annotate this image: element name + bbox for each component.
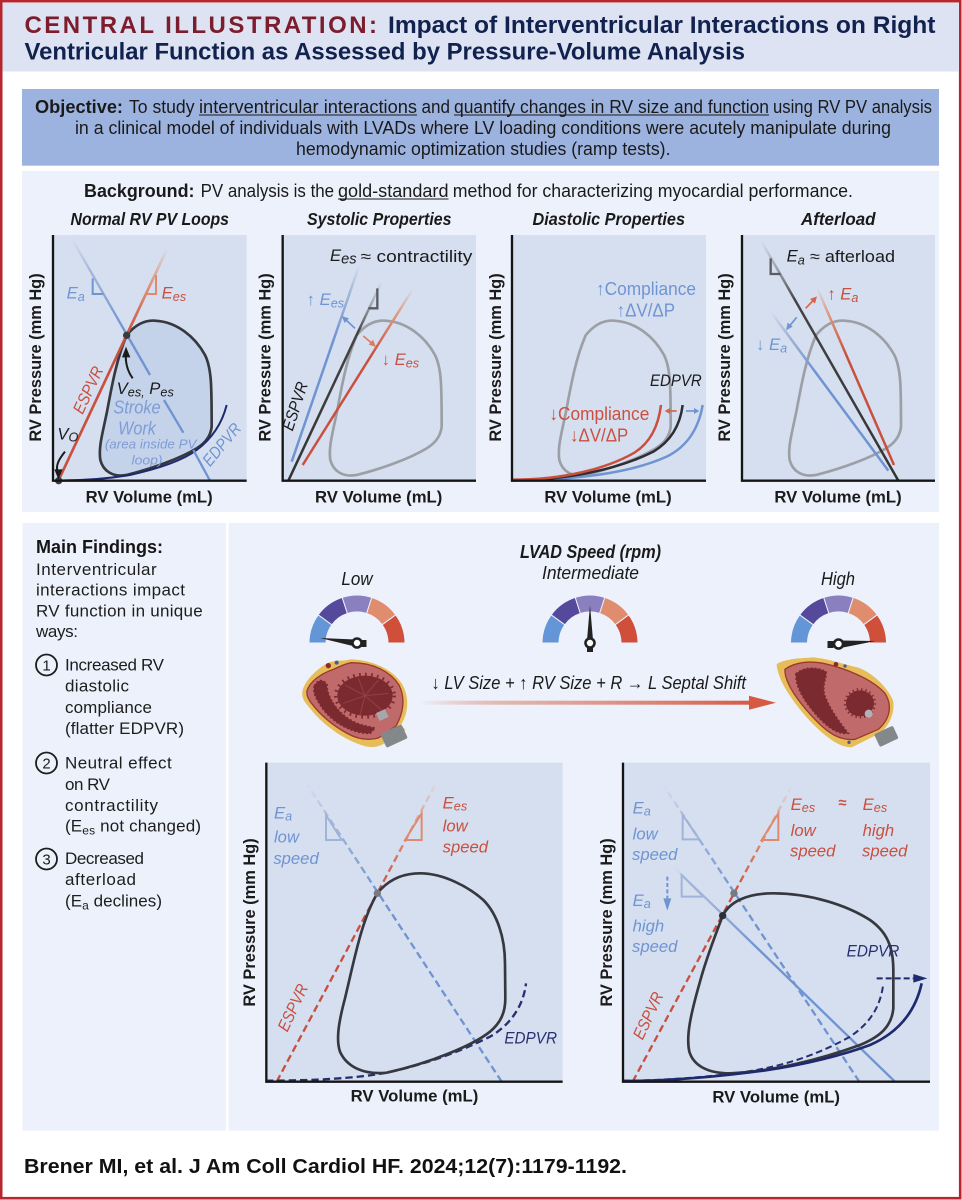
label Ea high speed: E [633, 891, 644, 910]
gauge: low [309, 595, 405, 648]
label Ea low speed [632, 798, 678, 864]
finding 2: es [82, 824, 95, 838]
PV loop high speed [688, 893, 893, 1073]
label ESPVR: ESPVR [69, 363, 107, 417]
label Ea low speed: E [274, 803, 285, 822]
label increased Ees: ↑ E [307, 290, 331, 309]
Ees triangle [762, 813, 778, 840]
label Ees high speed: high [863, 821, 894, 840]
Ea high speed solid line [673, 867, 895, 1082]
end systolic point low speed [730, 890, 738, 897]
label Ees low speed [443, 793, 489, 857]
title band [2, 3, 959, 72]
label Ea low speed: low [274, 828, 300, 847]
background statement: method for characterizing myocardial performance. [453, 181, 853, 201]
red shift arrow [665, 408, 677, 414]
label Ves Pes: es, [128, 386, 145, 400]
panel: objective: To study [129, 97, 194, 117]
label Ea: a [78, 290, 85, 304]
label Ees low speed: E [791, 795, 802, 814]
panel: objective: using RV PV analysis [773, 97, 932, 117]
column headings: Diastolic Properties [532, 209, 685, 229]
increased Ees line [292, 265, 359, 462]
gauge: intermediate [542, 595, 638, 652]
finding 1 [36, 654, 184, 738]
panel: background [22, 171, 939, 512]
red shift arrow [806, 296, 817, 308]
label EDPVR: EDPVR [504, 1028, 557, 1047]
panel: objective: interventricular interactions [199, 97, 417, 117]
icon: heart cross section with enlarged RV [777, 657, 899, 747]
label Ees low speed [790, 795, 836, 861]
finding 1: (flatter EDPVR) [65, 719, 184, 738]
approx equal sign: ≈ [838, 795, 846, 811]
label Ees high speed: speed [862, 842, 908, 861]
label Ea low speed: E [633, 798, 644, 817]
ESPVR dashed line [277, 781, 437, 1082]
finding 3: a [82, 899, 89, 913]
panel: main findings [22, 523, 226, 1131]
axes [53, 235, 247, 481]
label decreased compliance: ↓ΔV/ΔP [570, 425, 628, 446]
label EDPVR: EDPVR [650, 371, 702, 390]
chart: low LVAD speed PV loop [240, 763, 563, 1106]
red shift arrow [363, 336, 376, 347]
x axis label: RV Volume (mL) [712, 1087, 840, 1106]
label Ees low speed: E [443, 793, 454, 812]
label stroke work: loop) [131, 453, 162, 467]
label Ees low speed: speed [790, 842, 836, 861]
panel: objective [22, 89, 939, 166]
heading: Main Findings: [36, 537, 163, 557]
dashed arrow right [877, 974, 927, 983]
x axis label: RV Volume (mL) [544, 488, 672, 507]
label increased Ea: a [851, 291, 858, 305]
column headings: Systolic Properties [307, 209, 452, 229]
intro text: Interventricular [36, 560, 157, 579]
finding 2: 2 [42, 756, 51, 772]
title band: Impact of Interventricular Interactions on Right [388, 12, 936, 39]
high speed label: High [821, 569, 855, 589]
citation: Brener MI, et al. J Am Coll Cardiol HF. 2024;12(7):1179-1192. [24, 1156, 627, 1178]
baseline Ea line [761, 240, 898, 481]
EDPVR dashed curve [266, 983, 526, 1081]
grey PV loop [559, 321, 671, 476]
finding 3: 3 [42, 852, 51, 868]
label increased compliance: ↑Compliance [596, 278, 696, 299]
end systolic point high speed [719, 912, 726, 919]
PV loop with stroke work fill [100, 321, 212, 476]
y axis label: RV Pressure (mm Hg) [486, 273, 505, 442]
label Ees low speed: low [791, 821, 817, 840]
decreased Ees line [303, 289, 413, 465]
label Ea afterload [787, 247, 895, 267]
label Ees contractility: es [341, 252, 357, 268]
label Ees low speed: es [454, 799, 468, 813]
label Ves Pes: P [145, 379, 160, 398]
background statement: Background: [84, 181, 194, 201]
intro text: RV function in unique [36, 602, 203, 621]
background statement: gold-standard [338, 181, 448, 201]
intro text: ways: [35, 622, 78, 641]
x axis label: RV Volume (mL) [86, 488, 213, 507]
dashed arrow down [663, 877, 671, 911]
increased Ea line [817, 288, 894, 465]
arrow to end systolic point [122, 347, 133, 378]
blue shift arrow [686, 408, 699, 414]
label Ea low speed: a [285, 809, 292, 823]
label increased Ea: ↑ E [827, 284, 851, 303]
finding 2: not changed) [95, 817, 201, 836]
label EDPVR: EDPVR [847, 942, 899, 961]
title band: Ventricular Function as Assessed by Pressure-Volume Analysis [24, 38, 745, 66]
finding 1: diastolic [65, 677, 130, 696]
label Ees high speed [862, 795, 908, 861]
arterial elastance line [72, 238, 210, 481]
label ESPVR: ESPVR [278, 379, 312, 433]
Ea low speed dashed line [663, 784, 859, 1082]
label Ea high speed: speed [632, 937, 678, 956]
plot area [266, 763, 563, 1082]
finding 2: Neutral effect [65, 753, 172, 772]
label increased compliance [596, 278, 696, 321]
x axis label: RV Volume (mL) [351, 1087, 478, 1106]
panel: objective: and [422, 97, 450, 117]
plot area: afterload [742, 235, 935, 481]
label stroke work: Stroke [113, 396, 161, 417]
finding 3: afterload [65, 870, 136, 889]
label Ea low speed [273, 803, 319, 868]
label EDPVR: EDPVR [199, 419, 245, 470]
LVAD speed heading: LVAD Speed (rpm) [520, 542, 661, 562]
chart: low versus high LVAD speed PV loop [597, 763, 930, 1106]
finding 2 [36, 752, 201, 838]
grey PV loop [330, 321, 442, 476]
finding 3 [36, 848, 162, 913]
ESPVR dashed line [633, 785, 792, 1082]
label Ves Pes: es [160, 386, 174, 400]
blue shift arrow [342, 316, 355, 328]
axes [266, 763, 563, 1082]
label stroke work: Work [118, 417, 157, 438]
title band: CENTRAL ILLUSTRATION: [24, 12, 377, 39]
label stroke work: (area inside PV [105, 437, 198, 451]
label Ea high speed: high [633, 916, 664, 935]
label Ea low speed: speed [273, 849, 319, 868]
axes [742, 235, 935, 481]
blue shift arrow [786, 317, 797, 330]
label increased compliance: ↑ΔV/ΔP [617, 300, 675, 321]
label decreased compliance [549, 403, 649, 446]
plot area: normal PV loop [52, 235, 247, 481]
label ESPVR: ESPVR [629, 989, 667, 1042]
label Ees: es [173, 290, 187, 304]
Ees triangle [405, 813, 422, 840]
panel: objective: Objective: [35, 97, 123, 117]
baseline Ees line [288, 282, 382, 481]
panel: objective: quantify changes in RV size and function [454, 97, 769, 117]
label Ea: E [67, 283, 78, 302]
y axis label: RV Pressure (mm Hg) [240, 838, 259, 1007]
label Ea afterload: a [798, 253, 805, 267]
x axis label: RV Volume (mL) [774, 488, 902, 507]
axes [623, 763, 930, 1082]
axes [283, 235, 476, 481]
finding 2: on RV [65, 775, 111, 794]
label V0: O [68, 430, 78, 444]
Ea triangle [93, 278, 103, 294]
label Ees contractility: E [330, 246, 341, 265]
Ea dashed line [306, 783, 502, 1082]
Ees triangle [145, 275, 156, 294]
finding 1: compliance [65, 698, 152, 717]
finding 3: (E [65, 892, 82, 911]
Ea low triangle [683, 815, 699, 839]
chart: normal RV PV loops and systolic properties [26, 235, 476, 507]
label Ees low speed: es [802, 801, 816, 815]
x axis label: RV Volume (mL) [315, 488, 442, 507]
label decreased Ees: ↓ E [382, 350, 406, 369]
arrow: septal shift [420, 696, 776, 710]
finding 2: contractility [65, 796, 158, 815]
panel: objective: in a clinical model of individuals with LVADs where LV loading conditions were acutely manipulate during [75, 118, 891, 138]
EDPVR curve [58, 405, 227, 480]
label decreased Ees: es [406, 357, 420, 371]
y axis label: RV Pressure (mm Hg) [597, 838, 616, 1007]
plot area: diastolic properties [512, 235, 706, 481]
intro text: interactions impact [36, 580, 185, 600]
plot area [623, 763, 930, 1082]
red EDPVR [512, 405, 661, 480]
slope triangle [368, 288, 377, 308]
label Ea low speed: a [644, 804, 651, 818]
label decreased compliance: ↓Compliance [549, 403, 649, 424]
plot area: systolic properties [282, 235, 476, 481]
panel: objective: hemodynamic optimization studies (ramp tests). [296, 139, 670, 159]
icon: heart cross section with dilated LV [302, 659, 408, 748]
arrow to V0 [54, 452, 65, 479]
origin point [55, 477, 62, 484]
label Ea low speed: low [633, 824, 659, 843]
end systolic point [374, 890, 381, 897]
y axis label: RV Pressure (mm Hg) [26, 273, 45, 442]
label decreased Ea: ↓ E [756, 335, 780, 354]
EDPVR low speed dashed curve [623, 983, 883, 1081]
axes [512, 235, 706, 481]
end systolic point [123, 332, 130, 339]
label increased Ees: es [331, 297, 345, 311]
blue EDPVR [512, 405, 703, 480]
chart: diastolic properties and afterload [486, 235, 935, 507]
label Ees contractility [330, 246, 473, 268]
label Ees contractility: ≈ contractility [361, 247, 473, 266]
PV loop [338, 873, 505, 1073]
EDPVR high speed solid curve [623, 983, 922, 1081]
label Ea low speed: speed [632, 845, 678, 864]
label Ees low speed: low [443, 817, 469, 836]
label Ves Pes: V [117, 379, 128, 398]
finding 3: Decreased [65, 849, 144, 868]
label Ees low speed: speed [443, 838, 489, 857]
label Ea afterload: ≈ afterload [810, 247, 895, 266]
finding 1: Increased RV [65, 656, 165, 675]
label Ea afterload: E [787, 247, 798, 266]
finding 1: 1 [42, 658, 51, 674]
y axis label: RV Pressure (mm Hg) [715, 273, 734, 442]
label Ees high speed: es [874, 801, 888, 815]
label V0: V [57, 424, 68, 443]
black EDPVR [512, 405, 683, 480]
finding 2: (E [65, 817, 82, 836]
decreased Ea line [771, 312, 888, 471]
label stroke work [105, 396, 198, 467]
low speed label: Low [341, 569, 374, 589]
column headings [70, 209, 876, 229]
intro text [35, 560, 203, 641]
gauge: high [790, 595, 886, 648]
column headings: Normal RV PV Loops [70, 209, 229, 229]
label Ea high speed: a [644, 897, 651, 911]
Ea high triangle [682, 875, 703, 897]
intermediate speed label: Intermediate [542, 563, 639, 583]
label ESPVR: ESPVR [274, 981, 312, 1034]
panel: LVAD speed study [229, 523, 939, 1131]
label decreased Ea: a [780, 342, 787, 356]
finding 3: declines) [89, 892, 162, 911]
slope triangle [771, 258, 781, 274]
background statement [84, 181, 853, 201]
label Ea high speed [632, 891, 678, 956]
ESPVR line [58, 248, 167, 481]
background statement: PV analysis is the [201, 181, 334, 201]
Ea triangle [326, 815, 342, 840]
y axis label: RV Pressure (mm Hg) [255, 273, 274, 442]
label: septal shift: ↓ LV Size + ↑ RV Size + R → L Septal Shift [432, 673, 747, 693]
label Ees high speed: E [863, 795, 874, 814]
label Ees: E [162, 283, 173, 302]
column headings: Afterload [800, 209, 876, 229]
grey PV loop [789, 321, 901, 476]
